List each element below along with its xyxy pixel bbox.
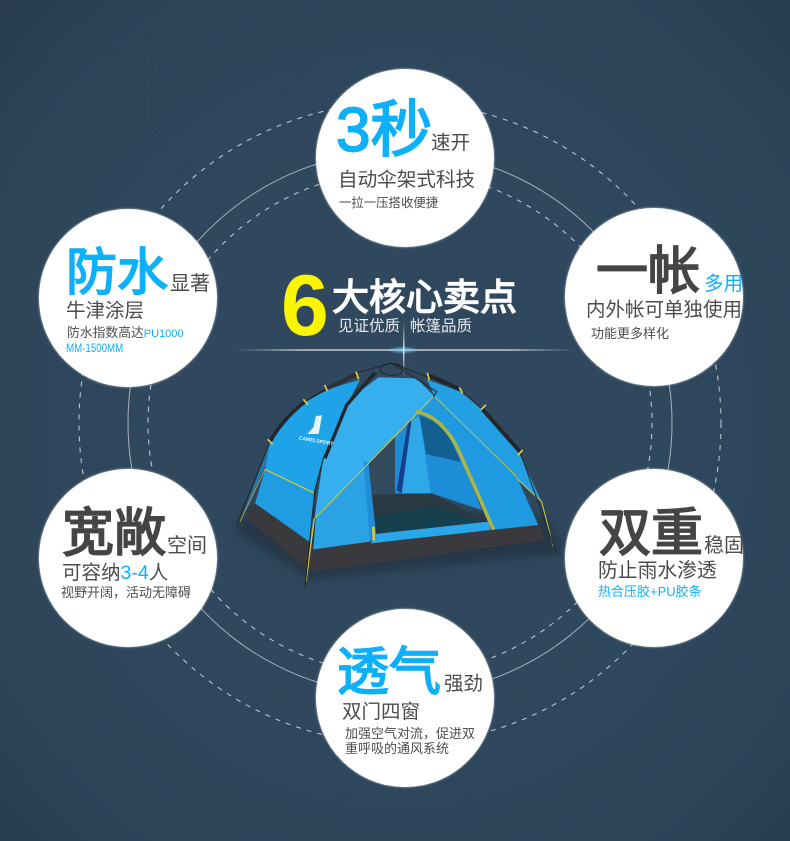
panel: waterproof bbox=[39, 209, 217, 387]
panel: breathable bbox=[316, 609, 494, 787]
description: 热合压胶+PU胶条 bbox=[598, 584, 702, 599]
heading: 防水 bbox=[66, 244, 168, 301]
left fly bbox=[265, 380, 360, 493]
subheading: 防止雨水渗透 bbox=[598, 560, 717, 582]
mesh window bbox=[419, 415, 461, 462]
black poles bbox=[237, 363, 557, 587]
heading suffix: 速开 bbox=[431, 132, 470, 154]
right inner panel bbox=[417, 397, 538, 530]
tent logo bbox=[298, 415, 334, 447]
heading suffix: 强劲 bbox=[444, 673, 483, 695]
heading: 宽敞 bbox=[62, 505, 166, 563]
inner back wall bbox=[395, 413, 482, 510]
heading: 一帐 bbox=[596, 243, 700, 301]
tent logo: CAMELSPORT bbox=[298, 435, 334, 447]
heading: 透气 bbox=[337, 644, 441, 702]
yellow trim bbox=[240, 396, 553, 582]
subheading: 牛津涂层 bbox=[66, 300, 144, 322]
heading suffix: 空间 bbox=[167, 535, 207, 557]
subheading: 内外帐可单独使用 bbox=[586, 299, 742, 321]
description: 一拉一压搭收便捷 bbox=[339, 196, 438, 210]
right fly bbox=[427, 379, 542, 502]
subheading: 双门四窗 bbox=[342, 701, 420, 723]
yellow pole ticks bbox=[268, 372, 523, 455]
floor bbox=[369, 493, 488, 534]
left wall bbox=[255, 470, 314, 543]
subheading: 自动伞架式科技 bbox=[338, 169, 475, 191]
panel: one tent many uses bbox=[565, 208, 743, 386]
heading suffix: 多用 bbox=[704, 273, 743, 295]
description: 视野开阔，活动无障碍 bbox=[61, 585, 191, 600]
description line one: 加强空气对流，促进双 bbox=[345, 726, 475, 741]
subtitle: 见证优质 帐篷品质 bbox=[338, 318, 472, 335]
panel: double layer bbox=[565, 469, 743, 647]
big six: 6 bbox=[281, 258, 329, 354]
title text: 大核心卖点 bbox=[332, 277, 517, 318]
heading: 双重 bbox=[599, 505, 703, 563]
dark groundsheet skirt bbox=[247, 504, 545, 572]
door pole buckle bbox=[369, 527, 378, 541]
description: 防水指数高达PU1000 bbox=[67, 325, 184, 340]
description line two: MM-1500MM bbox=[66, 341, 123, 355]
panel: spacious bbox=[39, 469, 217, 647]
background seen through door bbox=[368, 433, 403, 493]
ground shadow bbox=[233, 503, 563, 580]
front fly bbox=[314, 377, 434, 518]
description line two: 重呼吸的通风系统 bbox=[345, 741, 449, 756]
heading suffix: 显著 bbox=[170, 273, 210, 295]
heading suffix: 稳固 bbox=[704, 535, 744, 557]
front left wall bbox=[313, 462, 370, 549]
panel: 3 second opening bbox=[316, 69, 494, 247]
heading: 3秒 bbox=[336, 96, 432, 165]
subheading: 可容纳3-4人 bbox=[62, 562, 168, 584]
door strip bbox=[363, 462, 377, 541]
description: 功能更多样化 bbox=[591, 326, 669, 341]
title block bbox=[281, 258, 517, 354]
floor threshold bbox=[371, 522, 491, 543]
